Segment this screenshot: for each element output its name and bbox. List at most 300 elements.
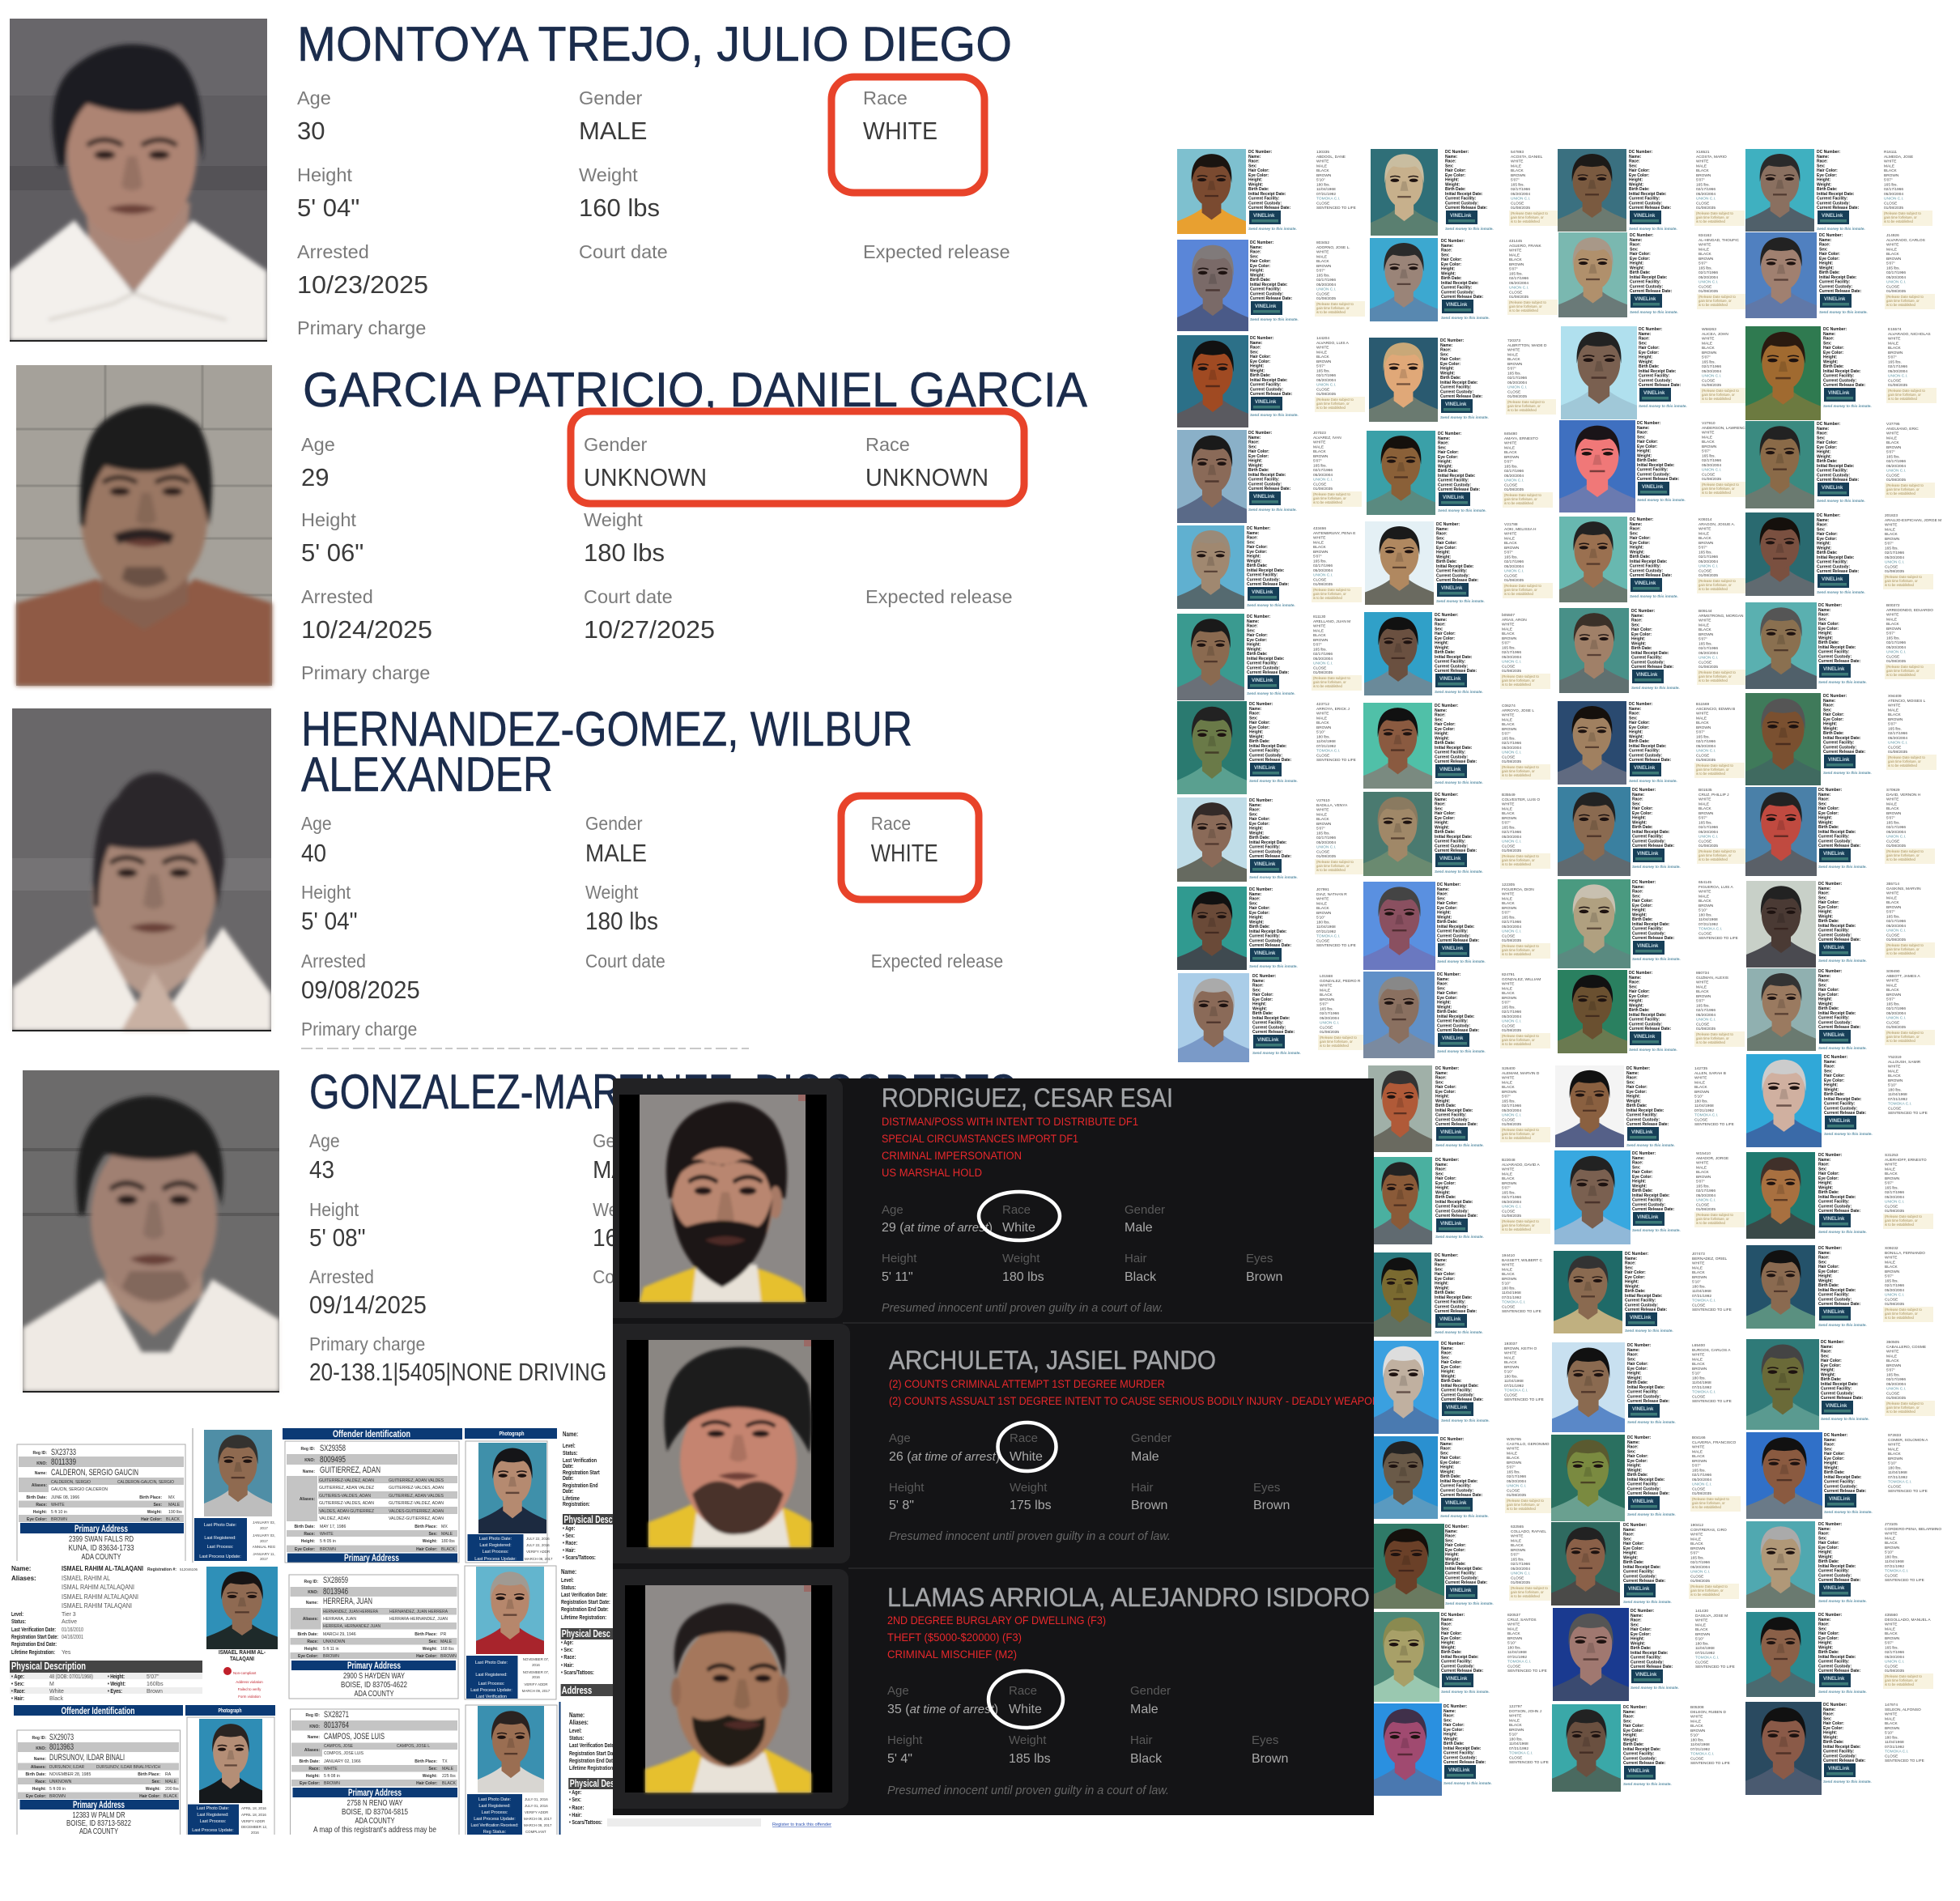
registry record: Calderon: CALDERON, SERGIO GAUCIN xyxy=(51,1468,138,1478)
inmate: Brown xyxy=(1368,1341,1544,1434)
inmate: Contreras xyxy=(1551,1522,1739,1605)
inmate: Cruz, Santos: 820537 xyxy=(1507,1613,1520,1618)
registry record: Dursunov: MALE xyxy=(165,1780,177,1784)
inmate: Badilla: BADILLA, VENYA xyxy=(1316,803,1348,808)
inmate: Almeida xyxy=(1745,149,1932,232)
inmate: Degollado xyxy=(1746,1612,1933,1697)
inmate: Guzman: 860734 xyxy=(1696,971,1709,976)
registry record: Al-Talaqani: • Sex: xyxy=(11,1682,24,1687)
inmate: Brown: 193037 xyxy=(1504,1342,1517,1346)
registry record: Campos: Height: xyxy=(306,1774,320,1779)
inmate: Cruz, Phillip xyxy=(1558,787,1747,876)
registry record: Guitierrez: JULY 22, 2016 xyxy=(526,1537,550,1541)
detail fields: 175 lbs xyxy=(1010,1499,1052,1512)
inmate: Claveria xyxy=(1551,1435,1741,1521)
registry record: Calderon: JANUARY 03, xyxy=(253,1533,275,1537)
detail fields: Arrested xyxy=(301,586,373,607)
inmate: Al-Hingad: 834162 xyxy=(1699,233,1711,238)
registry record: Al-Talaqani: ISMAEL RAHIM AL xyxy=(62,1575,110,1582)
record: Rodriguez xyxy=(603,1078,1282,1318)
registry sidebar: top: • Sex: xyxy=(563,1533,575,1539)
registry record: Herrera: VERIFY ADDR xyxy=(524,1682,548,1686)
inmate: Bernadez: BERNADEZ, ORIEL xyxy=(1692,1257,1728,1261)
inmate: Castillo xyxy=(1368,1436,1555,1519)
detail fields: Height xyxy=(301,882,351,903)
registry record: Guitierrez: GUITIERREZ, ADAN VALDEZ xyxy=(319,1486,374,1491)
inmate: Figueroa, Luis xyxy=(1558,879,1738,968)
registry sidebar: top: • Age: xyxy=(563,1525,575,1532)
registry record: Calderon: Last Photo Date: xyxy=(204,1523,236,1528)
callout: race highlighted xyxy=(831,77,984,193)
inmate: Acosta, Mario: ACOSTA, MARIO xyxy=(1696,155,1727,159)
inmate: Comer xyxy=(1746,1432,1928,1519)
inmate: Contreras: 190412 xyxy=(1690,1523,1703,1528)
detail fields: 5' 04" xyxy=(297,194,359,222)
registry record: Dursunov: Aliases: xyxy=(31,1765,46,1770)
registry sidebar: middle: • Sex: xyxy=(561,1647,573,1653)
mugshot: Rodriguez xyxy=(619,1095,827,1302)
inmate: Antenbruny xyxy=(1177,525,1362,609)
registry sidebar: bottom fields: • Age: xyxy=(569,1789,581,1796)
detail fields: Hair xyxy=(1131,1481,1154,1495)
registry record: Guitierrez: MX xyxy=(441,1525,448,1529)
inmate: Guzman xyxy=(1558,970,1745,1053)
registry record: Campos: Primary Address xyxy=(348,1788,402,1798)
inmate: Alicea: W58263 xyxy=(1702,327,1716,332)
registry record: Al-Talaqani: Address violation xyxy=(236,1680,263,1684)
inmate: Arias: ARIAS, ARON xyxy=(1502,618,1527,623)
inmate: Anguiano xyxy=(1745,421,1935,508)
registry record: Campos xyxy=(290,1705,557,1839)
registry record: Herrera: Hair Color: xyxy=(416,1654,437,1659)
inmate: Cordero-Pena: J73105 xyxy=(1885,1522,1898,1527)
registry record: Herrera: Sex: xyxy=(428,1639,437,1644)
inmate: Gonzalez, William xyxy=(1363,972,1550,1058)
registry record: Dursunov: Weight: xyxy=(146,1787,160,1792)
inmate: Adorno: ADORNO, JOSE L. xyxy=(1316,245,1350,250)
inmate: Cordero-Pena xyxy=(1746,1521,1941,1608)
registry record: Calderon: Name: xyxy=(35,1471,47,1476)
inmate: Amador xyxy=(1554,1150,1745,1244)
registry record: Dursunov: APRIL 18, 2016 xyxy=(241,1813,266,1817)
inmate: Dotson: 122797 xyxy=(1509,1704,1522,1709)
inmate: Allen: ALLEN, SARAH B xyxy=(1694,1071,1726,1076)
detail fields: Eyes xyxy=(1252,1733,1278,1747)
registry record: Dursunov: RA xyxy=(165,1772,172,1777)
registry record: Dursunov: Birth Place: xyxy=(138,1772,160,1777)
registry record: Calderon: Last Process: xyxy=(207,1545,233,1550)
inmate: Dasilva: 141430 xyxy=(1695,1609,1708,1614)
inmate: Amador: W15410 xyxy=(1696,1151,1711,1156)
registry record: Dursunov: 8013963 xyxy=(49,1742,74,1752)
detail fields: Weight xyxy=(593,1199,646,1220)
detail fields: Brown xyxy=(1252,1752,1288,1766)
detail fields: Primary charge xyxy=(301,662,430,683)
registry record: Herrera: SX28659 xyxy=(323,1576,348,1585)
registry record: Campos: JULY 01, 2016 xyxy=(525,1804,548,1808)
inmate: Acosta, Mario: X16521 xyxy=(1696,150,1710,155)
inmate: Figueroa, Dion: 122305 xyxy=(1502,882,1515,887)
registry record: Calderon: Primary Address xyxy=(74,1525,128,1534)
inmate: Atencio: X94409 xyxy=(1888,694,1902,699)
detail fields: 185 lbs xyxy=(1009,1752,1051,1766)
registry record: Dursunov: Name: xyxy=(34,1757,46,1762)
registry record: Guitierrez: GUITERREZ-VALDEZ, ADAN xyxy=(319,1478,374,1483)
detail fields: Gender xyxy=(1131,1431,1171,1445)
inmate: Anderson, Lawrence: ANDERSON, LAWRENCE J xyxy=(1702,426,1751,431)
inmate: Ascencio: B11569 xyxy=(1696,702,1710,707)
registry record: Guitierrez: Race: xyxy=(304,1532,315,1537)
registry record: Guitierrez: GUTIERES-VALDES, ADAN xyxy=(319,1494,371,1499)
registry record: Calderon: 2017 xyxy=(260,1526,268,1530)
inmate: Seleon: SELEON, ALFONSO xyxy=(1885,1707,1921,1712)
inmate: Degollado: 435560 xyxy=(1885,1613,1898,1618)
detail fields: 5' 04" xyxy=(301,908,358,935)
inmate: Alvarado, David: ALVARADO, DAVID A xyxy=(1502,1163,1540,1167)
registry sidebar: middle: Name: xyxy=(561,1568,576,1576)
callout: gender and race unknown highlighted xyxy=(571,411,1024,504)
registry sidebar: top: Registration: xyxy=(563,1501,590,1508)
detail fields xyxy=(301,434,1013,683)
detail fields: Arrested xyxy=(309,1266,374,1287)
inmate: Figueroa, Luis: 654145 xyxy=(1699,880,1711,885)
detail fields: Age xyxy=(889,1431,911,1445)
detail fields: Black xyxy=(1130,1752,1163,1766)
detail fields: Presumed innocent until proven guilty in a court of law. xyxy=(887,1784,1169,1797)
inmate: Degollado: DEGOLLADO, MANUEL A xyxy=(1885,1618,1931,1622)
registry record: Campos: Last Process Update: xyxy=(474,1817,516,1822)
inmate: David: S70929 xyxy=(1886,788,1900,793)
registry record: Campos: 5 ft 08 in xyxy=(324,1774,340,1779)
inmate: Bassett: 194410 xyxy=(1502,1253,1515,1258)
registry sidebar: bottom fields: Registration End Date: xyxy=(569,1758,617,1764)
registry record: Dursunov: Last Photo Date: xyxy=(197,1806,229,1811)
registry record: Herrera: HERNANDEZ, JUAN HERRERA xyxy=(389,1610,449,1614)
registry sidebar: top: Level: xyxy=(563,1443,576,1449)
inmate: Contreras: CONTRERAS, CIRO xyxy=(1690,1528,1727,1533)
inmate: Arroya xyxy=(1177,701,1356,794)
charges: (2) COUNTS ASSUALT 1ST DEGREE INTENT TO CAUSE SERIOUS BODILY INJURY - DEADLY WEAPON xyxy=(889,1395,1380,1407)
charges: DIST/MAN/POSS WITH INTENT TO DISTRIBUTE DF1 xyxy=(882,1116,1138,1128)
detail fields: Male xyxy=(1131,1450,1159,1464)
inmate: Alicea: ALICEA, JOHN xyxy=(1702,332,1728,337)
inmate: Antenbruny: ANTENBRUNY, PENA E xyxy=(1313,531,1355,536)
inmate: Guzman: GUZMAN, ALEXIS xyxy=(1696,976,1728,980)
registry record: Al-Talaqani: 512046106 xyxy=(180,1567,198,1571)
registry record: Campos: SX28271 xyxy=(324,1710,349,1720)
panel: record Gonzalez-Martinez xyxy=(23,1065,1018,1393)
name heading: ARCHULETA, JASIEL PANDO xyxy=(889,1346,1216,1375)
inmate: Diaz, Nathan: J07991 xyxy=(1316,887,1329,892)
registry record: Al-Talaqani: Lifetime Registration: xyxy=(11,1650,55,1656)
inmate: Collado: 632565 xyxy=(1511,1525,1524,1529)
registry record: Guitierrez: VALDEZ, ADAN xyxy=(319,1516,350,1521)
inmate: Ascencio xyxy=(1558,701,1745,785)
inmate: Arellano: ARELLANO, JUAN M xyxy=(1313,619,1350,624)
registry sidebar: top: Registration End xyxy=(563,1482,598,1489)
registry record: Dursunov: NOVEMBER 28, 1985 xyxy=(49,1772,91,1777)
inmate: Collado: COLLADO, RAFAEL xyxy=(1511,1529,1546,1534)
registry record: Campos: BOISE, ID 83704-5815 xyxy=(342,1807,408,1817)
registry sidebar: bottom xyxy=(559,1702,560,1835)
registry record: Herrera: HERRERA, HERNANDEZ JUAN xyxy=(323,1624,381,1629)
registry record: Al-Talaqani: ISMAEL RAHIM AL-TALAQANI xyxy=(62,1565,143,1572)
inmate: Armstrong: ARMSTRONG, MORGAN xyxy=(1699,614,1744,619)
inmate: Caballero: CABALLERO, COSME xyxy=(1886,1345,1926,1350)
detail fields xyxy=(309,1130,673,1386)
inmate: Cruz, Phillip: B01535 xyxy=(1699,788,1712,793)
registry record: Dursunov: Photograph xyxy=(219,1708,241,1714)
registry record: Herrera: 5 ft 11 in xyxy=(323,1647,339,1652)
registry record: Campos: KNO: xyxy=(309,1725,320,1729)
registry sidebar: bottom fields: Level: xyxy=(569,1728,582,1734)
inmate: Badilla xyxy=(1177,797,1365,882)
registry record: Dursunov: 200 lbs xyxy=(165,1787,179,1792)
inmate: Acosta, Daniel xyxy=(1371,149,1559,236)
registry record: Guitierrez: Name: xyxy=(303,1469,315,1474)
detail fields: Age xyxy=(301,434,335,455)
detail fields: Male xyxy=(1130,1703,1159,1716)
registry record: Al-Talaqani: 160lbs xyxy=(147,1682,164,1687)
inmate: Auerhoff xyxy=(1746,1152,1933,1239)
registry record: Al-Talaqani: 04/16/2001 xyxy=(62,1635,83,1640)
detail fields: Weight xyxy=(1009,1733,1047,1747)
inmate: Alemam xyxy=(1368,1065,1550,1152)
detail fields: White xyxy=(1009,1703,1042,1716)
detail fields: Weight xyxy=(585,882,639,903)
registry record: Campos: CAMPOS, JOSE L xyxy=(397,1744,430,1749)
registry record: Al-Talaqani: Registration End Date: xyxy=(11,1642,57,1648)
inmate: Burgos: BURGOS, CARLOS A xyxy=(1692,1348,1731,1353)
inmate: Alemam: ALEMAM, MARVIN D xyxy=(1502,1071,1540,1076)
detail fields: 10/23/2025 xyxy=(297,270,428,299)
registry record: Herrera: KNO: xyxy=(308,1590,318,1595)
inmate: Aguero: 431445 xyxy=(1509,239,1522,244)
registry record: Dursunov: VERIFY ADDR xyxy=(241,1819,265,1823)
registry sidebar: middle: Registration Start Date: xyxy=(561,1599,610,1605)
detail fields: Race xyxy=(865,434,910,455)
registry record: Campos: MARCH 09, 2017 xyxy=(524,1817,552,1821)
registry record: Dursunov: 12383 W PALM DR xyxy=(73,1810,125,1820)
name heading: HERNANDEZ-GOMEZ, WILBUR xyxy=(301,702,912,756)
registry record: Herrera: Last Verification xyxy=(476,1695,507,1699)
inmate: Deleon: B05308 xyxy=(1690,1705,1704,1710)
registry record: Al-Talaqani: ISMAEL RAHIM TALAQANI xyxy=(62,1602,132,1610)
detail fields: 26 (at time of arrest) xyxy=(889,1450,1000,1464)
detail fields xyxy=(297,87,1010,338)
inmate: Comer: COMER, SOLOMON A xyxy=(1888,1438,1928,1443)
detail fields: Expected release xyxy=(871,950,1003,972)
registry record: Herrera: 2900 S HAYDEN WAY xyxy=(343,1671,405,1681)
detail fields: 29 (at time of arrest) xyxy=(882,1221,993,1235)
registry record: Guitierrez: MALE xyxy=(441,1532,453,1537)
registry sidebar: bottom fields xyxy=(568,1712,613,1824)
inmate: Bassett: BASSETT, WILBERT C xyxy=(1502,1258,1542,1263)
detail fields: 43 xyxy=(309,1156,334,1184)
detail fields: Height xyxy=(309,1199,359,1220)
registry record: Herrera: Weight: xyxy=(423,1647,437,1652)
detail fields xyxy=(889,1431,1290,1543)
detail fields: 35 (at time of arrest) xyxy=(887,1703,998,1716)
detail fields: 180 lbs xyxy=(584,538,665,567)
registry sidebar: middle xyxy=(561,1568,615,1696)
registry record: Dursunov: DECEMBER 12, xyxy=(241,1825,267,1829)
inmate: Almeida: ALMEIDA, JOSE xyxy=(1884,155,1913,159)
detail fields: White xyxy=(1002,1221,1035,1235)
inmate: Bonilla: BONILLA, FERNANDO xyxy=(1885,1251,1925,1256)
registry record: Campos: Last Verification Received: xyxy=(471,1823,518,1828)
registry record: Al-Talaqani: Form violation xyxy=(238,1695,261,1699)
inmate: Claveria: CLAVERIA, FRANCISCO xyxy=(1692,1440,1737,1445)
registry record: Guitierrez: WHITE xyxy=(320,1532,334,1537)
inmate: Dotson: DOTSON, JOHN J xyxy=(1509,1709,1542,1714)
detail fields: Race xyxy=(1002,1203,1031,1217)
registry sidebar: bottom fields: Name: xyxy=(569,1712,585,1719)
detail fields: MALE xyxy=(579,117,647,145)
registry record: Herrera: ADA COUNTY xyxy=(355,1689,393,1699)
registry sidebar: middle: Lifetime Registration: xyxy=(561,1614,606,1621)
registry record: Al-Talaqani: 48 (DOB: 07/01/1968) xyxy=(49,1674,93,1680)
registry sidebar: middle: Address xyxy=(562,1686,592,1696)
registry record: Calderon: SX23733 xyxy=(51,1448,76,1457)
detail fields: 20-138.1|5405|NONE DRIVING xyxy=(309,1359,606,1386)
inmate: Abdool xyxy=(1177,149,1356,234)
registry record: Calderon: MX xyxy=(168,1495,175,1500)
registry record: Calderon: MALE xyxy=(168,1503,181,1508)
detail fields: Arrested xyxy=(297,241,369,262)
registry record: Al-Talaqani: White xyxy=(49,1689,64,1695)
registry record: Calderon: Aliases: xyxy=(32,1483,47,1488)
registry record: Dursunov: 5 ft 09 in xyxy=(49,1787,66,1792)
inmate: Abdool: 130335 xyxy=(1316,150,1329,155)
registry sidebar: top: Date: xyxy=(563,1488,574,1495)
mugshot: Garcia Patricio xyxy=(16,365,272,686)
inmate: Alvarado, Carlos: J14926 xyxy=(1886,233,1899,238)
inmate: Ascencio: ASCENCIO, EDWIN B xyxy=(1696,707,1735,712)
detail fields: Race xyxy=(871,813,911,834)
inmate: Arellano: 811130 xyxy=(1313,615,1326,619)
registry sidebar: bottom fields: Status: xyxy=(569,1735,584,1742)
registry record: Guitierrez: VALDEZ-GUTIERREZ, ADAN xyxy=(389,1516,444,1521)
registry record: Guitierrez: BROWN xyxy=(320,1547,336,1552)
inmate: Bassett xyxy=(1368,1252,1542,1337)
registry record: Dursunov: Hair Color: xyxy=(139,1794,160,1799)
inmate: Gonzalez, Pedro: L01568 xyxy=(1320,974,1333,979)
registry record: Calderon: BLACK xyxy=(166,1517,181,1522)
registry record: Herrera: 2016 xyxy=(532,1663,540,1667)
inmate: Armstrong: B09144 xyxy=(1699,609,1712,614)
inmate: Aoki: V21788 xyxy=(1504,522,1518,527)
detail fields: UNKNOWN xyxy=(584,463,707,491)
registry record: Guitierrez: MAY 17, 1986 xyxy=(320,1525,347,1529)
registry record: Campos: CAMPOS, JOSE xyxy=(324,1744,353,1749)
registry record: Dursunov: Birth Date: xyxy=(25,1772,46,1777)
detail fields: Height xyxy=(297,164,352,185)
registry record: Dursunov: DURSUNOV, ILDAR BINALIYEVICH xyxy=(96,1765,160,1770)
registry record: Calderon: Weight: xyxy=(147,1510,162,1515)
registry record: Guitierrez: Reg ID: xyxy=(301,1447,315,1452)
registry record: Herrera: UNKNOWN xyxy=(323,1639,346,1644)
registry record: Guitierrez: Last Photo Date: xyxy=(479,1537,512,1542)
detail fields: Height xyxy=(301,509,356,530)
registry sidebar: bottom fields: • Hair: xyxy=(569,1812,582,1818)
registry record: Calderon: JANUARY 03, xyxy=(253,1520,275,1525)
detail fields: Weight xyxy=(1002,1252,1040,1265)
registry record: Al-Talaqani: • Hair: xyxy=(11,1696,24,1702)
registry record: Guitierrez: Birth Date: xyxy=(294,1525,315,1529)
registry record: Herrera: Height: xyxy=(304,1647,318,1652)
detail fields: Brown xyxy=(1246,1270,1282,1284)
registry record: Al-Talaqani: • Weight: xyxy=(108,1682,125,1687)
registry record: Herrera: Last Registered: xyxy=(475,1673,508,1678)
inmate: Dasilva: DASILVA, JOSE M xyxy=(1695,1614,1728,1618)
registry record: Calderon: Last Registered: xyxy=(204,1536,236,1541)
detail fields: Court date xyxy=(593,1266,673,1287)
registry record: Al-Talaqani: Yes xyxy=(62,1650,71,1656)
inmate: Albritton: ALBRITTON, WADE D xyxy=(1507,343,1547,348)
registry sidebar: middle: • Age: xyxy=(561,1639,573,1646)
registry record: Herrera: NOVEMBER 07, xyxy=(523,1657,549,1661)
registry sidebar: middle: Status: xyxy=(561,1584,576,1591)
registry sidebar: top: • Race: xyxy=(563,1540,577,1546)
inmate: Colvester: COLVESTER, LUIS O xyxy=(1502,797,1540,802)
inmate: Aguero: AGUERO, FRANK xyxy=(1509,244,1542,249)
detail fields: Presumed innocent until proven guilty in a court of law. xyxy=(889,1529,1171,1543)
detail fields: Primary charge xyxy=(309,1333,425,1355)
inmate: Acosta, Daniel: 547893 xyxy=(1511,150,1524,155)
detail fields: Height xyxy=(887,1733,923,1747)
mugshot: Archuleta xyxy=(627,1340,834,1547)
registry record: Calderon: KUNA, ID 83634-1733 xyxy=(68,1543,134,1553)
detail fields: 40 xyxy=(301,840,326,867)
detail fields: Expected release xyxy=(863,241,1010,262)
charges: (2) COUNTS CRIMINAL ATTEMPT 1ST DEGREE MURDER xyxy=(889,1378,1165,1390)
inmate: Gaskins: 355714 xyxy=(1886,882,1899,887)
registry record: Al-Talaqani: 5'07" xyxy=(147,1674,159,1680)
registry record: Herrera: Name: xyxy=(306,1601,318,1605)
registry record: Guitierrez: 5 ft 05 in xyxy=(320,1539,336,1544)
inmate: Araujo-Espichan: 201823 xyxy=(1885,513,1898,518)
inmate: Colvester: B35549 xyxy=(1502,793,1516,797)
inmate: Alvarado, David: B23048 xyxy=(1502,1158,1516,1163)
registry record: Campos: Reg Status: xyxy=(483,1830,506,1835)
inmate: Dotson xyxy=(1368,1703,1549,1796)
inmate: Araujo-Espichan xyxy=(1745,512,1941,596)
detail fields: Expected release xyxy=(865,586,1013,607)
inmate: Al-Hingad xyxy=(1558,232,1747,317)
detail fields: Brown xyxy=(1131,1499,1167,1512)
inmate: Almeida: R16111 xyxy=(1884,150,1897,155)
registry record: Calderon: Reg ID: xyxy=(32,1451,47,1456)
registry sidebar: bottom fields: • Scars/Tattoos: xyxy=(569,1819,602,1826)
registry record: Campos: JULY 01, 2016 xyxy=(525,1797,548,1801)
registry record: Herrera: 2016 xyxy=(532,1675,540,1679)
mugshot: Gonzalez-Martinez xyxy=(23,1070,279,1393)
registry sidebar: top: Date: xyxy=(563,1463,574,1469)
registry record: Guitierrez: Photograph xyxy=(499,1431,525,1437)
inmate: Gonzalez, William: GONZALEZ, WILLIAM xyxy=(1502,977,1541,982)
registry record: Guitierrez xyxy=(283,1428,557,1563)
callout: race circled xyxy=(997,1423,1056,1471)
registry record: Guitierrez: Weight: xyxy=(423,1539,437,1544)
inmate: Aragon xyxy=(1559,517,1747,602)
inmate: Arroyo xyxy=(1363,703,1550,789)
registry record: Campos: A map of this registrant's address may be xyxy=(313,1825,436,1835)
registry record: Calderon: Birth Date: xyxy=(26,1495,47,1500)
detail fields: Court date xyxy=(579,241,668,262)
inmate: Aragon: K09314 xyxy=(1699,517,1712,522)
registry record: Campos: Sex: xyxy=(428,1767,437,1771)
